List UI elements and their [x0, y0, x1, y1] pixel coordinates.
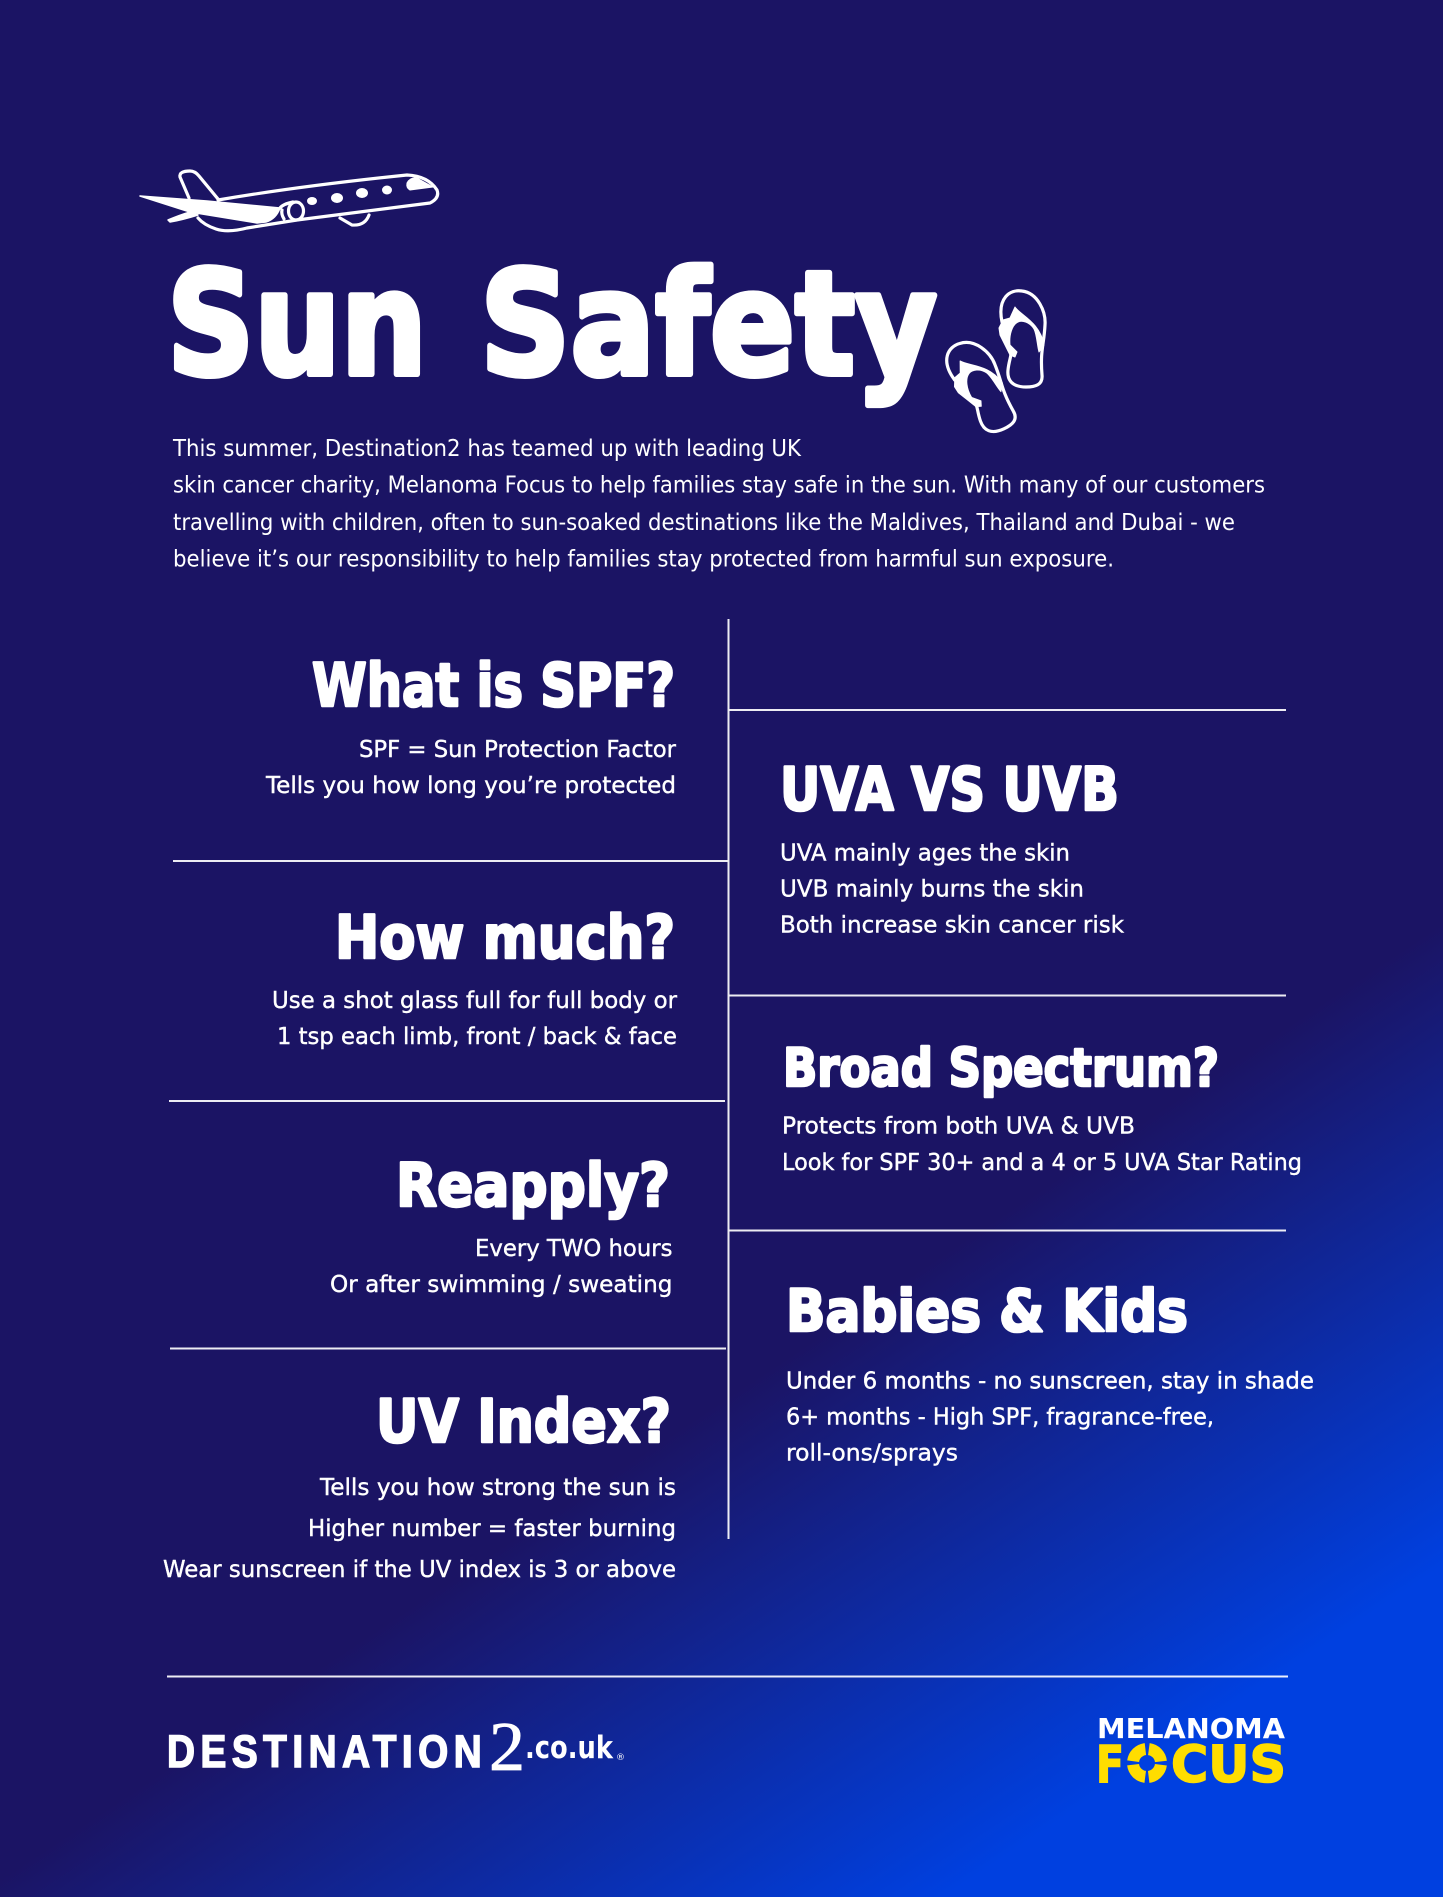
panel: UVA vs UVB: [780, 755, 1124, 938]
text: babies and kids advice: 6+ months - High SPF, fragrance-free,: [786, 1402, 1214, 1430]
logo: Destination2: 2: [489, 1709, 525, 1786]
heading: reapply: Reapply?: [396, 1151, 670, 1221]
text: reapply advice: Every TWO hours: [475, 1234, 672, 1262]
heading: UV index: UV Index?: [376, 1387, 671, 1457]
panel: how much: [272, 903, 677, 1050]
heading: what is SPF: What is SPF?: [312, 651, 675, 721]
text: broad spectrum facts: Look for SPF 30+ and a 4 or 5 UVA Star Rating: [782, 1148, 1302, 1176]
text: how much advice: 1 tsp each limb, front / back & face: [277, 1022, 677, 1050]
intro text: [172, 434, 1265, 572]
heading: how much: How much?: [335, 903, 675, 973]
logo: Destination2: DESTINATION: [167, 1726, 482, 1777]
panel: babies and kids: [786, 1277, 1314, 1466]
intro text: travelling with children, often to sun-soaked destinations like the Maldives, Thailand and Dubai - we: [173, 508, 1235, 536]
heading: UVA vs UVB: UVA VS UVB: [780, 755, 1119, 825]
text: broad spectrum facts: Protects from both UVA & UVB: [782, 1112, 1135, 1140]
text: reapply advice: Or after swimming / sweating: [330, 1270, 672, 1298]
logo: Melanoma Focus: [1096, 1712, 1286, 1795]
title: Sun: [167, 240, 427, 408]
heading: babies and kids: Babies & Kids: [786, 1277, 1188, 1345]
text: UV index advice: Higher number = faster burning: [308, 1514, 676, 1542]
panel: UV index: [163, 1387, 676, 1583]
title: Safety: [480, 240, 937, 408]
text: babies and kids advice: roll-ons/sprays: [786, 1438, 958, 1466]
icon: flip flops: [939, 291, 1045, 440]
logo: Melanoma Focus: F: [1096, 1736, 1124, 1795]
text: UVA vs UVB facts: UVA mainly ages the skin: [780, 838, 1070, 866]
logo: Destination2: [167, 1709, 625, 1786]
heading: broad spectrum: Broad Spectrum?: [783, 1038, 1219, 1099]
logo: Destination2: ®: [616, 1753, 625, 1763]
text: SPF definition: SPF = Sun Protection Factor: [359, 735, 676, 763]
panel: reapply: [330, 1151, 672, 1298]
logo: Destination2: .co.uk: [525, 1730, 614, 1766]
text: babies and kids advice: Under 6 months - no sunscreen, stay in shade: [786, 1366, 1314, 1394]
intro text: This summer, Destination2 has teamed up with leading UK: [172, 434, 802, 462]
icon: airplane: [140, 171, 438, 231]
logo: Melanoma Focus: CUS: [1171, 1736, 1286, 1795]
text: SPF definition: Tells you how long you’re protected: [265, 771, 676, 799]
intro text: believe it’s our responsibility to help families stay protected from harmful sun exposure.: [173, 544, 1114, 572]
panel: what is SPF: [265, 651, 676, 799]
text: how much advice: Use a shot glass full for full body or: [272, 986, 677, 1014]
logo: Melanoma Focus: MELANOMA: [1097, 1712, 1285, 1745]
intro text: skin cancer charity, Melanoma Focus to help families stay safe in the sun. With many of our customers: [173, 470, 1265, 498]
panel: broad spectrum: [782, 1038, 1302, 1176]
text: UVA vs UVB facts: Both increase skin cancer risk: [780, 910, 1124, 938]
text: UV index advice: Tells you how strong the sun is: [319, 1473, 676, 1501]
text: UV index advice: [163, 1473, 676, 1583]
text: UVA vs UVB facts: [780, 838, 1124, 938]
text: reapply advice: [330, 1234, 672, 1298]
title: [167, 240, 937, 408]
text: UVA vs UVB facts: UVB mainly burns the skin: [780, 874, 1084, 902]
text: how much advice: [272, 986, 677, 1050]
text: broad spectrum facts: [782, 1112, 1302, 1176]
text: babies and kids advice: [786, 1366, 1314, 1466]
text: UV index advice: Wear sunscreen if the UV index is 3 or above: [163, 1555, 676, 1583]
text: SPF definition: [265, 735, 676, 799]
